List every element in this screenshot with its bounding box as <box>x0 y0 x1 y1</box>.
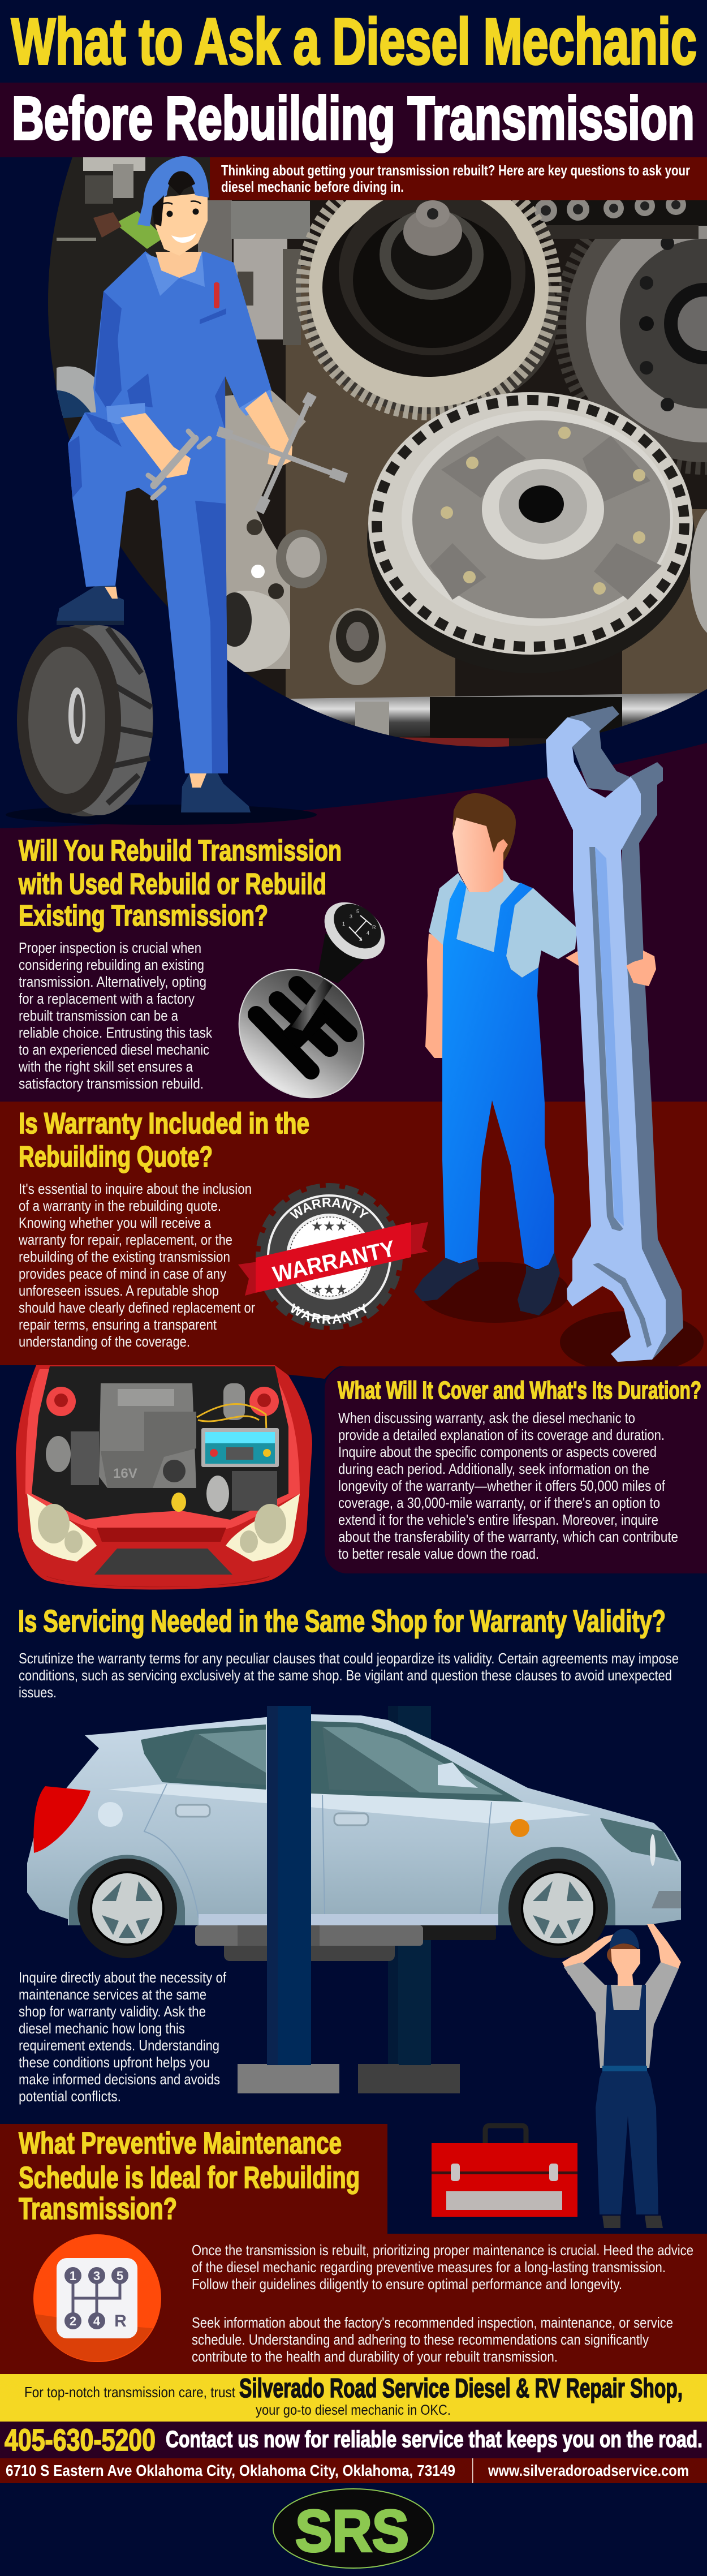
wrench groove <box>589 847 623 1231</box>
section text: rebuild: rebuilt transmission can be a <box>19 1007 178 1024</box>
section text: inquire: maintenance services at the same <box>19 1986 206 2003</box>
front wheel <box>498 1847 615 1958</box>
body <box>27 1714 681 1925</box>
mechanic shadow <box>420 1262 570 1323</box>
undercarriage <box>195 1925 496 1961</box>
section text: warranty: warranty for repair, replacement, or the <box>18 1231 232 1248</box>
car engine bay illustration <box>16 1365 312 1590</box>
icon: shift pattern: 3 <box>93 2269 100 2283</box>
yellow wires <box>197 1404 267 1448</box>
card text: extend it for the vehicle's entire lifespan. Moreover, inquire <box>338 1511 658 1528</box>
phone and contact band <box>0 2422 707 2458</box>
card text: to better resale value down the road. <box>338 1545 539 1562</box>
head <box>607 1929 640 1986</box>
shift pattern: 1 <box>342 921 345 927</box>
shift pattern <box>342 909 376 942</box>
icon: shift pattern: 5 <box>117 2269 123 2283</box>
intro text bar: diesel mechanic before diving in. <box>221 178 404 195</box>
warranty badge: ★★★ <box>311 1282 347 1297</box>
section heading: warranty: Is Warranty Included in the <box>19 1107 309 1140</box>
mechanic raised arm behind wheel <box>562 1934 614 1975</box>
main gear <box>303 162 558 414</box>
wrench dark side faces <box>567 706 683 1360</box>
headlights <box>27 1494 300 1562</box>
card text: coverage, a 30,000-mile warranty, or if there's an option to <box>338 1494 660 1511</box>
section text: rebuild: reliable choice. Entrusting this task <box>19 1024 213 1041</box>
section text: rebuild <box>18 939 213 1092</box>
section text: rebuild: with the right skill set ensures a <box>18 1058 193 1075</box>
engine bay left <box>45 157 310 436</box>
logo: SRS: SRS <box>295 2498 409 2564</box>
right edge drum <box>690 506 707 637</box>
shoes <box>414 1252 560 1315</box>
forearm and hands <box>120 392 292 478</box>
rear wheel <box>69 1855 185 1958</box>
section text: warranty: Knowing whether you will receive a <box>19 1214 211 1231</box>
section text: inquire: potential conflicts. <box>19 2088 121 2105</box>
mechanic lifting car <box>564 1924 681 2228</box>
far arm <box>566 951 579 966</box>
shirt <box>564 1962 679 2068</box>
yellow call-to-action band: For top-notch transmission care, trust <box>24 2384 236 2401</box>
intro text bar <box>210 157 707 200</box>
neck <box>156 252 202 278</box>
lug wrench <box>218 394 346 512</box>
shift pattern: R <box>372 924 376 930</box>
overalls <box>596 1985 658 2214</box>
work table <box>286 266 455 730</box>
front window <box>311 1721 523 1802</box>
section text: inquire: diesel mechanic how long this <box>19 2020 185 2037</box>
giant wrench <box>546 706 683 1362</box>
section text: inquire: requirement extends. Understanding <box>19 2037 219 2054</box>
shift pattern: 3 <box>350 914 352 919</box>
section text: warranty: understanding of the coverage. <box>19 1333 190 1350</box>
overalls <box>442 880 554 1269</box>
section background: dark red <box>0 1102 707 1379</box>
hair <box>153 171 195 226</box>
section text: warranty: It's essential to inquire about the inclusion <box>19 1180 252 1197</box>
section text: rebuild: for a replacement with a factory <box>19 990 195 1007</box>
section text: preventive maintenance: contribute to the health and durability of your rebuilt transmission. <box>192 2348 558 2365</box>
door lines <box>144 1784 492 1918</box>
rear window <box>141 1724 266 1790</box>
section text: rebuild: to an experienced diesel mechanic <box>19 1041 209 1058</box>
lever <box>291 979 333 1031</box>
engine block <box>99 1383 196 1488</box>
shifter plate <box>213 944 390 1123</box>
icon: gear shifter <box>213 891 396 1123</box>
belt <box>602 2066 647 2071</box>
taillight <box>33 1786 90 1853</box>
tire <box>17 624 153 816</box>
side parts <box>71 1431 99 1485</box>
shift slots <box>256 984 349 1071</box>
phone and contact band: 405-630-5200 <box>5 2423 156 2457</box>
yellow call-to-action band <box>0 2373 707 2422</box>
second gear <box>554 226 707 475</box>
raised leg foot <box>57 586 124 625</box>
face and neck <box>452 818 508 892</box>
wrench light faces <box>546 717 666 1362</box>
card text: Inquire about the specific components or aspects covered <box>338 1443 657 1460</box>
front lift post <box>267 1706 311 2065</box>
address and website band <box>0 2458 707 2483</box>
icon: toolbox <box>432 2126 577 2217</box>
silver casting <box>225 239 386 685</box>
red caps <box>46 1387 76 1416</box>
icon: shift pattern: 1 <box>70 2269 76 2283</box>
sill <box>199 1914 498 1925</box>
lower band and grille <box>97 1528 226 1542</box>
section text: servicing <box>19 1650 679 1701</box>
ground shadow <box>6 805 317 825</box>
raised right arm <box>647 1924 681 1975</box>
logo: SRS <box>273 2489 434 2568</box>
section heading: rebuild <box>18 835 342 932</box>
back lift post <box>388 1706 431 2065</box>
shift pattern: 5 <box>356 909 359 914</box>
section text: rebuild: considering rebuilding an existing <box>19 956 204 973</box>
section heading: preventive maintenance: Schedule is Ideal for Rebuilding <box>19 2161 360 2195</box>
head <box>137 156 209 256</box>
address and website band: 6710 S Eastern Ave Oklahoma City, Oklahoma City, Oklahoma, 73149 <box>6 2462 455 2479</box>
section heading: rebuild: Existing Transmission? <box>19 900 268 932</box>
belt highlight <box>108 1784 591 1824</box>
shift pattern: 4 <box>367 930 369 936</box>
right hand <box>626 951 656 986</box>
section text: warranty: of a warranty in the rebuilding quote. <box>19 1197 221 1214</box>
section text: inquire: Inquire directly about the necessity of <box>19 1969 227 1986</box>
card text: When discussing warranty, ask the diesel mechanic to <box>338 1409 635 1426</box>
icon: shift pattern: 2 <box>70 2314 76 2328</box>
warranty badge <box>238 1183 428 1330</box>
indicator <box>510 1819 529 1837</box>
jumpsuit shadow folds <box>68 291 228 773</box>
lift bases <box>238 2064 460 2093</box>
card: coverage and duration <box>325 1366 707 1573</box>
icon: shift pattern: R <box>114 2312 127 2330</box>
section heading: preventive maintenance: Transmission? <box>19 2192 177 2226</box>
section text: servicing: issues. <box>19 1684 57 1701</box>
section text: preventive maintenance <box>192 2242 693 2365</box>
icon: shift pattern: 4 <box>93 2314 101 2328</box>
section text: warranty: rebuilding of the existing transmission <box>19 1248 230 1265</box>
section text: rebuild: transmission. Alternatively, opting <box>19 973 206 990</box>
section text: preventive maintenance: Follow their guidelines diligently to ensure optimal performance and longevity. <box>192 2276 622 2293</box>
car on lift illustration <box>27 1714 681 1961</box>
standing leg foot <box>181 773 251 812</box>
cuffs <box>106 389 273 424</box>
mechanic with giant wrench <box>414 706 683 1362</box>
card text: during each period. Additionally, seek information on the <box>338 1460 649 1477</box>
wrench lower ridge <box>593 1263 652 1348</box>
section heading: warranty <box>19 1107 309 1173</box>
battery <box>201 1428 279 1467</box>
section heading: preventive maintenance: What Preventive Maintenance <box>19 2126 342 2160</box>
section background: maintenance <box>0 2124 707 2374</box>
blue jumpsuit <box>68 251 271 773</box>
section text: warranty: should have clearly defined replacement or <box>19 1299 255 1316</box>
section text: inquire <box>19 1969 227 2105</box>
stars: ★★★ <box>311 1219 347 1234</box>
headlight <box>600 1818 679 1861</box>
section text: inquire: shop for warranty validity. Ask the <box>19 2003 206 2020</box>
curved text: WARRANTY <box>290 1198 369 1219</box>
cap <box>137 156 209 226</box>
section heading: rebuild: with Used Rebuild or Rebuild <box>18 868 326 901</box>
left arm <box>425 934 447 1058</box>
engine block: 16V <box>113 1466 137 1481</box>
shirt <box>429 868 577 978</box>
yellow call-to-action band: your go-to diesel mechanic in OKC. <box>256 2402 451 2418</box>
big wrench shadow <box>560 1311 704 1373</box>
section text: warranty: provides peace of mind in case of any <box>19 1265 226 1282</box>
splined shaft <box>288 693 701 748</box>
lower vent <box>652 1891 681 1908</box>
wrench in hand <box>148 431 209 498</box>
ribbon <box>238 1222 428 1296</box>
engine well <box>32 1366 288 1520</box>
shift pattern: 2 <box>359 936 362 942</box>
lower back post <box>399 1946 431 2065</box>
collar <box>145 251 205 296</box>
icon: shift pattern <box>33 2234 161 2362</box>
knob cone <box>318 934 379 983</box>
mechanic with tire illustration <box>6 156 346 825</box>
hair <box>452 793 516 862</box>
section heading: warranty: Rebuilding Quote? <box>19 1141 213 1173</box>
pen and pocket <box>200 282 226 324</box>
card text <box>338 1409 678 1562</box>
photo: transmission parts in circle <box>34 157 707 757</box>
section text: warranty: repair terms, ensuring a transparent <box>19 1316 217 1333</box>
section text: inquire: these conditions upfront helps you <box>19 2054 210 2071</box>
warranty badge: WARRANTY <box>291 1303 367 1324</box>
warranty badge: WARRANTY <box>270 1236 398 1287</box>
section text: inquire: make informed decisions and avoids <box>19 2071 220 2088</box>
fuel cap <box>98 1802 123 1827</box>
shoes <box>602 2216 663 2228</box>
section text: rebuild: Proper inspection is crucial when <box>19 939 201 956</box>
section text: warranty: unforeseen issues. A reputable shop <box>19 1282 219 1299</box>
section text: warranty <box>18 1180 255 1350</box>
bolts row <box>526 200 707 239</box>
handles <box>176 1805 368 1825</box>
section text: rebuild: satisfactory transmission rebuild. <box>19 1075 204 1092</box>
section heading: preventive maintenance <box>19 2126 360 2226</box>
clutch drum <box>367 392 695 673</box>
section background: purple curve <box>0 743 707 1102</box>
section heading: rebuild: Will You Rebuild Transmission <box>19 835 342 867</box>
